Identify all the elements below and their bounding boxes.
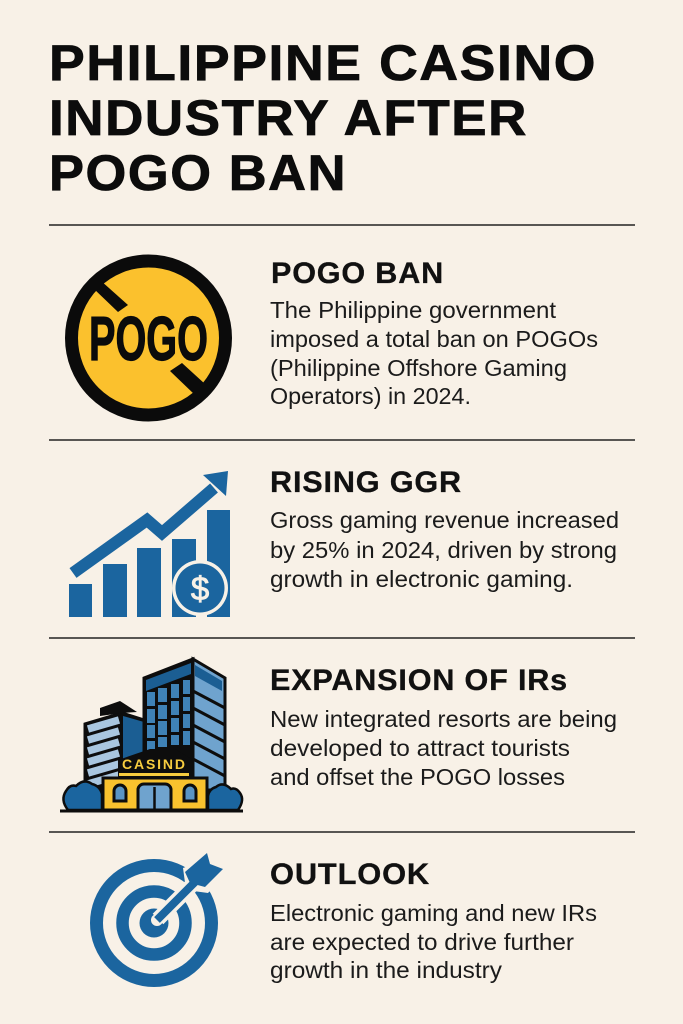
text block: rising GGR description: growth in electronic gaming.	[270, 566, 573, 592]
text block: POGO ban description: The Philippine government	[270, 297, 556, 323]
text block: expansion description: and offset the POGO losses	[270, 764, 565, 790]
text block: POGO ban description: (Philippine Offshore Gaming	[270, 355, 567, 381]
text block: expansion description: developed to attract tourists	[270, 735, 570, 761]
icon: casino resort building	[60, 659, 243, 812]
heading: POGO ban: POGO BAN	[271, 257, 444, 290]
title: POGO BAN	[49, 145, 347, 201]
text block: outlook description: Electronic gaming and new IRs	[270, 900, 597, 926]
heading: expansion of IRs: EXPANSION OF IRs	[270, 664, 568, 697]
text block: outlook description: growth in the industry	[270, 957, 502, 983]
icon: rising bar chart with dollar coin	[69, 471, 230, 617]
text block: POGO ban description: Operators) in 2024.	[270, 383, 471, 409]
panel: outlook	[96, 853, 597, 983]
text block: expansion description: New integrated resorts are being	[270, 706, 617, 732]
title	[49, 35, 597, 201]
panel: expansion of IRs	[60, 659, 617, 812]
title: PHILIPPINE CASINO	[49, 35, 597, 91]
text block: expansion description	[270, 706, 617, 790]
icon: POGO prohibition sign	[72, 261, 226, 415]
heading: rising GGR: RISING GGR	[270, 466, 462, 499]
text block: rising GGR description	[270, 507, 619, 592]
icon: target with arrow	[96, 853, 228, 980]
text block: outlook description: are expected to drive further	[270, 929, 574, 955]
icon: rising bar chart with dollar coin: $	[191, 570, 209, 607]
title: INDUSTRY AFTER	[49, 90, 528, 146]
text block: rising GGR description: Gross gaming revenue increased	[270, 507, 619, 533]
panel: rising GGR	[69, 466, 619, 617]
icon: POGO prohibition sign: POGO	[89, 305, 208, 374]
heading: outlook: OUTLOOK	[270, 858, 430, 891]
panel: POGO ban	[72, 257, 598, 415]
text block: outlook description	[270, 900, 597, 983]
text block: rising GGR description: by 25% in 2024, driven by strong	[270, 537, 617, 563]
text block: POGO ban description	[270, 297, 598, 409]
icon: casino resort building: CASIND	[122, 756, 186, 772]
text block: POGO ban description: imposed a total ban on POGOs	[270, 326, 598, 352]
